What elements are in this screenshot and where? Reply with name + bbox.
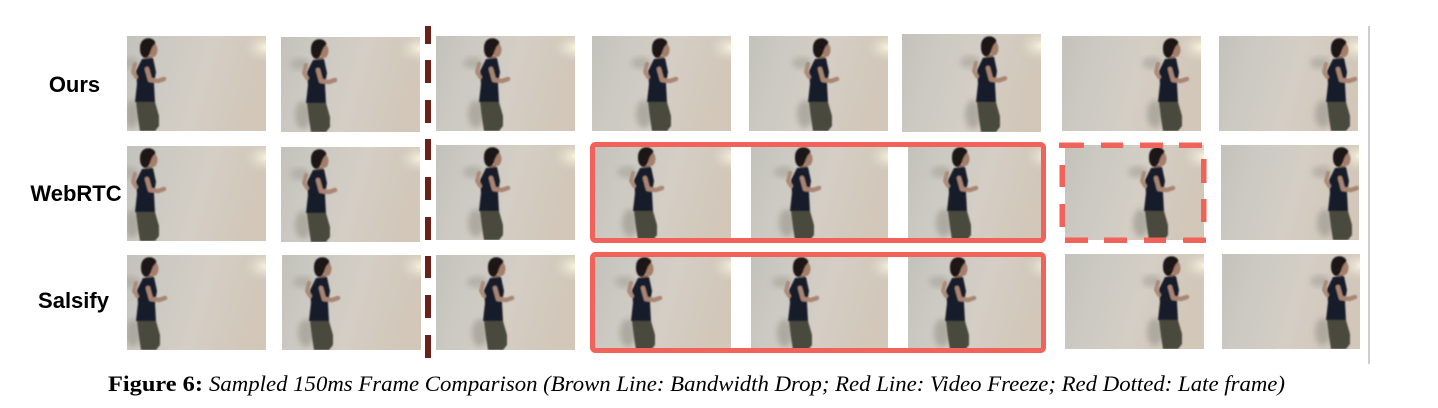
frames row: WebRTC [119, 145, 1360, 242]
red box: Salsify video freeze [592, 254, 1044, 350]
frames row: Ours [119, 34, 1358, 132]
caption: Figure 6: [108, 371, 203, 396]
red box: WebRTC video freeze [592, 144, 1044, 240]
right vertical rule [1368, 26, 1370, 364]
row label: Salsify: Salsify [38, 288, 110, 313]
row label: WebRTC: WebRTC [30, 181, 122, 206]
row label: Ours: Ours [49, 72, 100, 97]
brown dashed line: bandwidth drop [425, 26, 431, 358]
caption: Sampled 150ms Frame Comparison (Brown Line: Bandwidth Drop; Red Line: Video Freeze; Red Dotted: Late frame) [209, 371, 1285, 396]
red dotted box: WebRTC late frame [1059, 142, 1206, 243]
frames row: Salsify [120, 254, 1361, 350]
